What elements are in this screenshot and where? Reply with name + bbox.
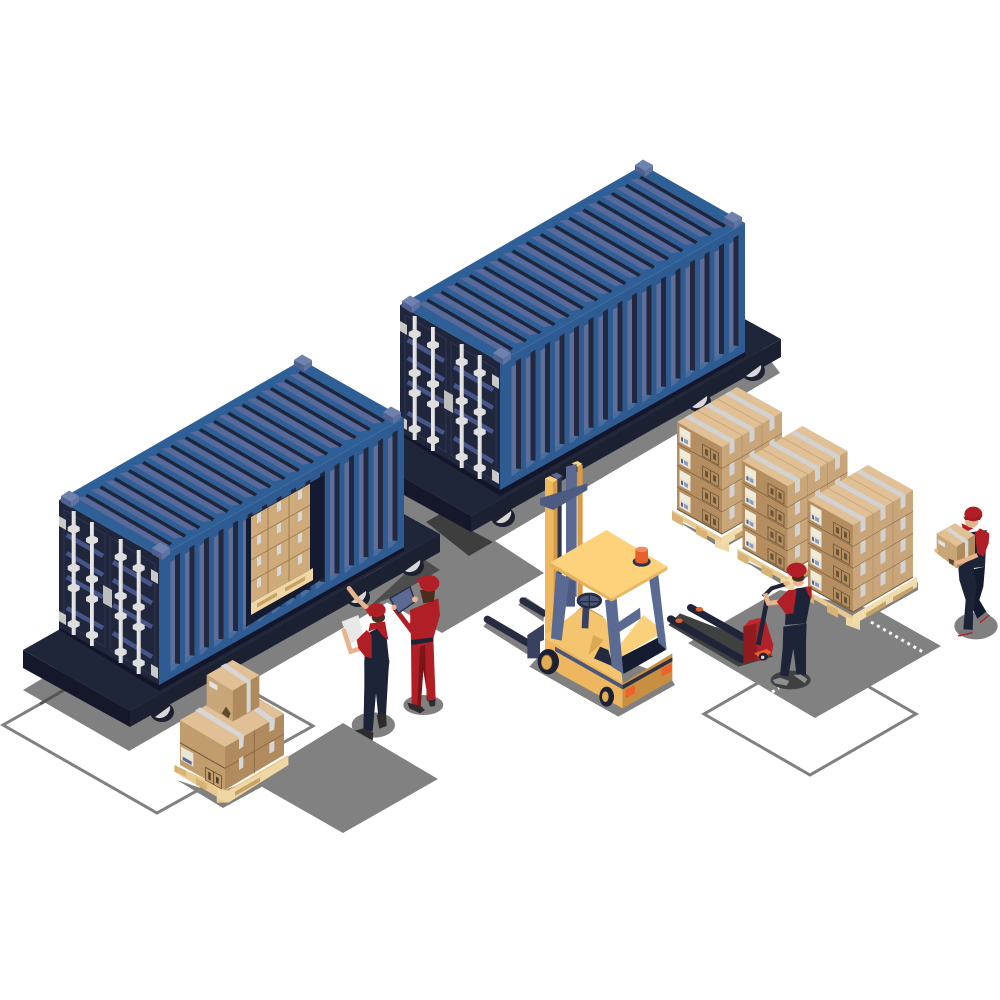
floor line seen through shadow: [40, 690, 64, 704]
pallet pump truck body and handle: [743, 584, 785, 663]
pallet stack 1: [672, 387, 787, 552]
pallet stack 2: [738, 426, 852, 591]
floor zone: right outlined square: [704, 653, 916, 775]
container 1 on flatbed: [23, 354, 440, 727]
worker with pump truck: [765, 563, 812, 689]
open side of container 1 with loaded boxes: [246, 475, 324, 627]
worker with clipboard: [342, 588, 395, 741]
shadow overlap under near wheels: [370, 558, 440, 606]
shadow overlap between containers: [426, 514, 493, 556]
pallet pump truck forks: [668, 607, 773, 667]
floor zone: left outlined square: [3, 638, 313, 813]
floor zone: gray area near small pallet: [250, 723, 438, 833]
container 2 on flatbed: [364, 160, 781, 532]
worker carrying a box: [934, 507, 998, 639]
worker with tablet: [390, 575, 443, 715]
forklift: [483, 461, 675, 717]
pallet stack 3: [803, 465, 918, 630]
small pallet with boxes: [174, 660, 288, 808]
shadow under container 1: [23, 555, 440, 751]
floor zone: gray area by pump truck: [688, 590, 941, 718]
shadow under container 2: [383, 320, 780, 633]
dotted floor marking: [772, 622, 923, 692]
